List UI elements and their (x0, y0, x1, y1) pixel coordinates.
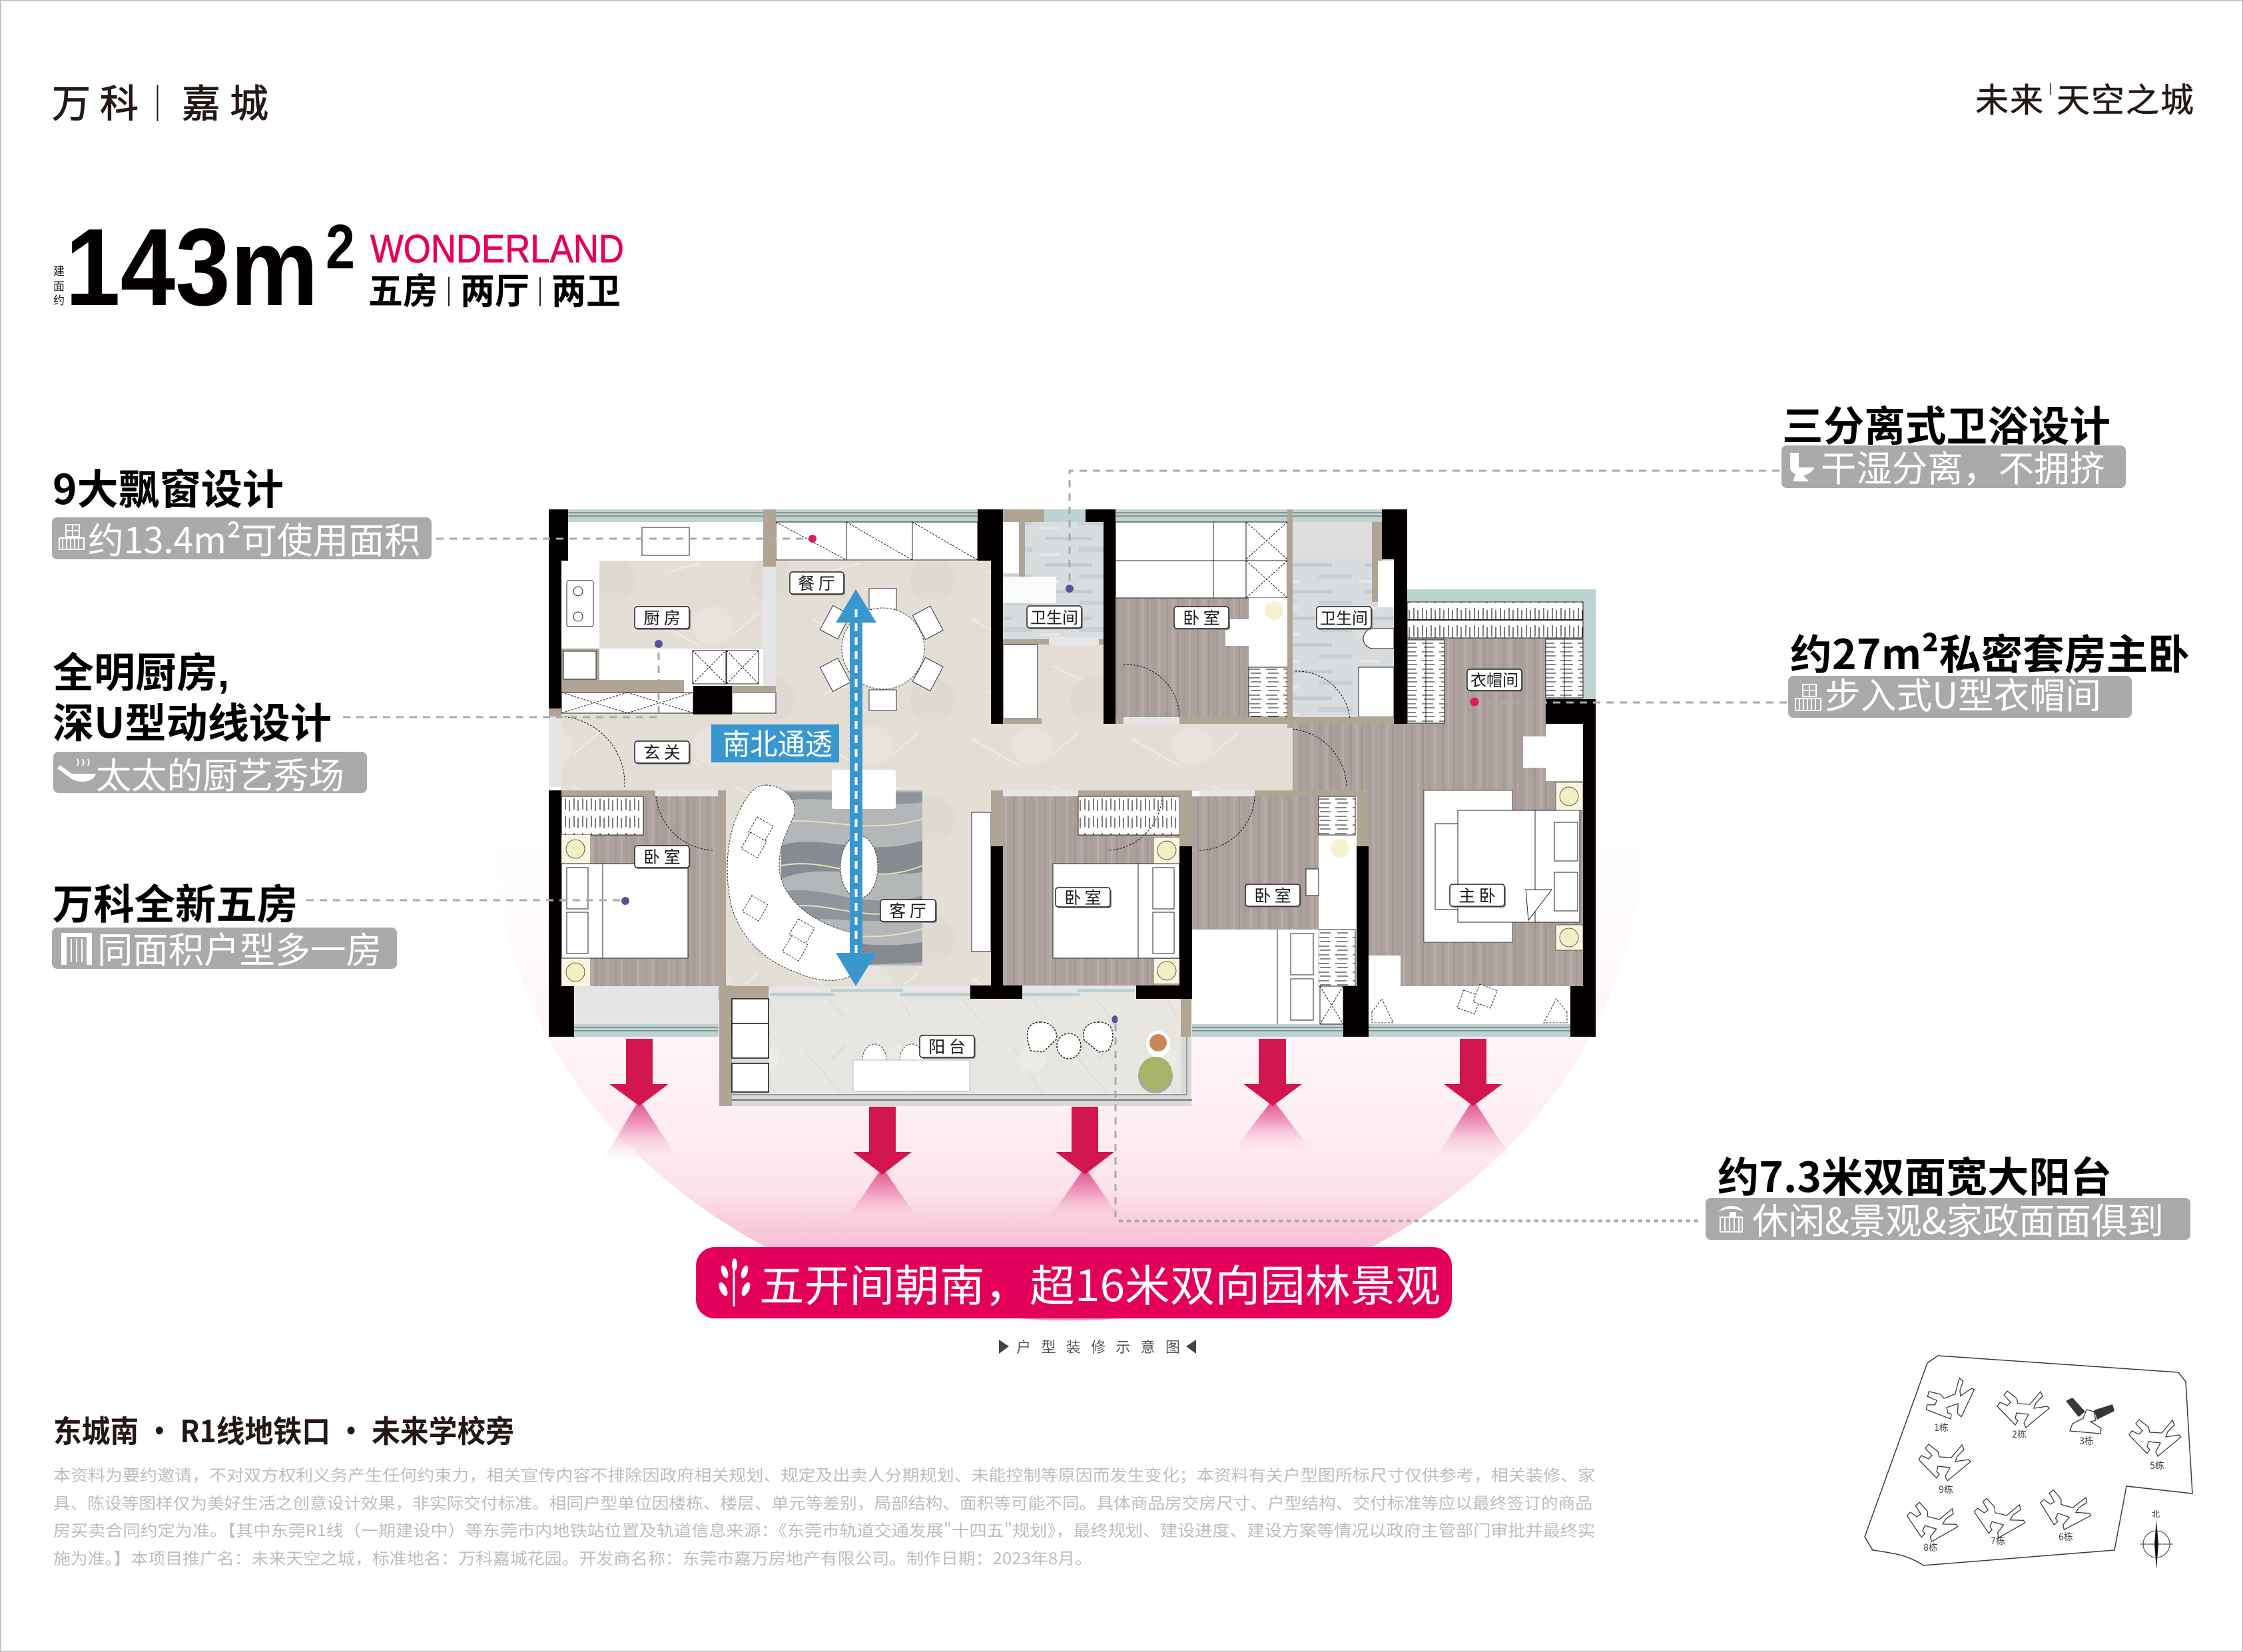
layout summary (368, 262, 621, 314)
label: walk-in closet: 衣帽间 (1470, 667, 1518, 690)
label: entry (635, 740, 691, 764)
label: middle bedroom (1056, 885, 1112, 909)
upper cabinets (776, 522, 978, 560)
leader line: bathroom (1066, 471, 1779, 593)
disclaimer: 本资料为要约邀请，不对双方权利义务产生任何约束力，相关宣传内容不排除因政府相关规划、规定及出卖人分期规划、未能控制等原因而发生变化；本资料有关户型图所标尺寸仅供参考，相关装修、家 (53, 1462, 1595, 1486)
callout: large balcony (1706, 1144, 2190, 1244)
project logo: future sky city: 未来 (1975, 74, 2045, 122)
icon: sprout (717, 1258, 752, 1306)
leader line: bay windows (436, 535, 816, 543)
area heading (53, 206, 624, 328)
label: built-up area approx: 面 (53, 277, 65, 294)
sliding doors (769, 986, 1136, 999)
building 2: 2栋 (2012, 1428, 2027, 1441)
bay window sills, white and grey (568, 522, 1570, 1024)
round coffee table (840, 836, 878, 898)
building 9: 9栋 (1939, 1483, 1953, 1496)
callout: bay windows (52, 456, 432, 564)
building 3, highlighted: 3栋 (2079, 1434, 2094, 1448)
building 6: 6栋 (2059, 1530, 2073, 1543)
label: top bedroom: 卧 室 (1183, 605, 1220, 629)
site plan key map (1865, 1356, 2192, 1569)
callout: kitchen: 深U型动线设计 (53, 690, 332, 750)
building 9 (1919, 1444, 1971, 1496)
dresser (1523, 724, 1583, 781)
label: left bedroom: 卧 室 (643, 844, 681, 868)
label: master bedroom (1450, 883, 1506, 908)
project logo: future sky city: 天空之城 (2057, 74, 2195, 122)
tv cabinet (972, 812, 991, 952)
arrow three (1044, 1107, 1125, 1225)
bathroom tile floors (1003, 522, 1394, 718)
room labels (635, 571, 1523, 1059)
south view arrows (604, 1039, 1512, 1225)
label: balcony: 阳 台 (928, 1034, 966, 1058)
label: built-up area approx (53, 262, 65, 308)
lounge chairs (1028, 1022, 1113, 1059)
callout: five rooms: 万科全新五房 (53, 871, 298, 931)
walls: beige partitions (549, 509, 1369, 986)
building 7: 7栋 (1991, 1534, 2005, 1547)
big area number: 143m (65, 206, 318, 328)
building 6 (2036, 1488, 2094, 1543)
bed (561, 864, 688, 958)
callout: bathroom: 三分离式卫浴设计 (1782, 393, 2110, 453)
label: entry: 玄 关 (643, 740, 681, 764)
banner: five south bays: 五开间朝南，超16米双向园林景观 (759, 1251, 1441, 1314)
icon: toilet (1790, 453, 1814, 481)
compass (2140, 1508, 2173, 1569)
tag: north south ventilation: 南北通透 (723, 720, 832, 763)
label: dining (790, 571, 845, 595)
building 8: 8栋 (1923, 1541, 1938, 1554)
potted plants (1138, 1031, 1173, 1093)
label: built-up area approx: 约 (53, 291, 65, 308)
walls: black structural (549, 509, 1596, 1037)
master nightstands (1556, 782, 1583, 950)
floor plan (549, 509, 1596, 1106)
bay cushions (1372, 984, 1567, 1023)
left bedroom fittings (561, 790, 718, 986)
brand logo: Vanke Jiacheng (52, 73, 278, 129)
label: bathroom one: 卫生间 (1030, 605, 1078, 628)
label: kitchen (635, 605, 691, 630)
label: dining: 餐 厅 (798, 571, 835, 595)
disclaimer: 施为准。】本项目推广名：未来天空之城，标准地名：万科嘉城花园。开发商名称：东莞市嘉万房地产有限公司。制作日期：2023年8月。 (53, 1545, 1092, 1569)
layout summary: 两卫 (551, 262, 621, 314)
layout summary: 五房 (368, 262, 438, 314)
project logo: future sky city (1975, 74, 2195, 122)
leader line: five rooms (306, 897, 629, 905)
stools and table (853, 1044, 970, 1091)
location line: 东城南 · R1线地铁口 · 未来学校旁 (53, 1408, 514, 1452)
callout: bathroom: 干湿分离，不拥挤 (1821, 439, 2105, 492)
building 5 (2129, 1420, 2181, 1472)
fourth bedroom fittings (1192, 790, 1369, 1024)
callout: kitchen: 太太的厨艺秀场 (96, 746, 344, 799)
site boundary (1865, 1356, 2192, 1565)
middle bedroom fittings (1003, 790, 1179, 983)
windows, teal glazing (568, 509, 1596, 1037)
icon: door (61, 933, 92, 965)
nightstands (561, 835, 590, 986)
label: kitchen: 厨 房 (643, 605, 681, 629)
arrow four (1233, 1039, 1312, 1151)
callout: master suite: 约27m²私密套房主卧 (1790, 621, 2190, 681)
disclaimer: 具、陈设等图样仅为美好生活之创意设计效果，非实际交付标准。相同户型单位因楼栋、楼层、单元等差别，局部结构、面积等可能不同。具体商品房交房尺寸、户型结构、交付标准等应以最终签订的商品 (53, 1490, 1592, 1514)
icon: balcony window (59, 525, 84, 549)
entry door (549, 716, 561, 787)
brand logo: Vanke Jiacheng: 万科 (52, 73, 148, 129)
arrow: north south airflow (836, 589, 876, 986)
rug (781, 790, 922, 965)
wonderland wordmark: WONDERLAND (370, 227, 624, 271)
bathroom one fittings (1003, 522, 1104, 724)
pink south view fan (495, 344, 1643, 1320)
layout summary: 两厅 (460, 262, 529, 314)
icon: wok (57, 759, 96, 782)
building 7 (1971, 1497, 2028, 1547)
callout: bay windows: 9大飘窗设计 (53, 456, 284, 516)
caption: decoration schematic: 户型装修示意图 (1016, 1336, 1180, 1357)
callout: large balcony: 休闲&景观&家政面面俱到 (1752, 1192, 2164, 1244)
building 8 (1903, 1501, 1961, 1554)
callout: five rooms (52, 871, 397, 973)
label: middle bedroom: 卧 室 (1064, 885, 1102, 909)
leader line: large balcony (1112, 1015, 1702, 1221)
callout: kitchen: 全明厨房, (53, 651, 229, 696)
storage cabinets (732, 999, 769, 1092)
callout: master suite (1788, 621, 2190, 719)
callout: bay windows: 约13.4m²可使用面积 (88, 511, 420, 564)
label: bathroom two: 卫生间 (1320, 605, 1368, 629)
label: living (880, 898, 937, 923)
disclaimer (53, 1462, 1595, 1569)
wood floors: bedrooms (561, 598, 1583, 986)
label: living: 客 厅 (889, 898, 926, 922)
callout: master suite: 步入式U型衣帽间 (1825, 667, 2101, 719)
building 2 (1997, 1391, 2049, 1441)
label: left bedroom (635, 844, 691, 869)
callout: five rooms: 同面积户型多一房 (97, 921, 382, 973)
master bedroom fittings (1372, 602, 1583, 1023)
arrow one (604, 1039, 678, 1159)
building 5: 5栋 (2150, 1459, 2164, 1472)
label: top bedroom (1174, 605, 1230, 630)
callout: large balcony: 约7.3米双面宽大阳台 (1718, 1144, 2112, 1204)
building 1 (1920, 1374, 1983, 1434)
kitchen fittings (561, 522, 978, 714)
compass: 北 (2152, 1508, 2160, 1519)
callout: bathroom (1781, 393, 2126, 492)
window sink (642, 527, 689, 555)
icon: balcony window (1795, 685, 1821, 710)
lower cupboards (561, 680, 776, 713)
label: master bedroom: 主 卧 (1458, 883, 1496, 907)
curved sofa (727, 785, 850, 980)
arrow two (842, 1107, 922, 1225)
label: fourth bedroom (1245, 883, 1301, 908)
lower counter (561, 649, 759, 684)
bedroom top fittings (1116, 522, 1287, 724)
cooktop counter (561, 561, 599, 649)
disclaimer: 房买卖合同约定为准。【其中东莞R1线（一期建设中）等东莞市内地铁站位置及轨道信息来源：《东莞市轨道交通发展"十四五"规划》，最终规划、建设进度、建设方案等情况以政府主管部门审批并最终实 (53, 1517, 1595, 1541)
master bed (1424, 790, 1580, 942)
balcony (719, 985, 1192, 1106)
door swings (561, 665, 1350, 850)
icon: round balcony (1718, 1206, 1744, 1232)
label: balcony (920, 1034, 976, 1059)
leader line: master suite (1470, 698, 1787, 706)
label: fourth bedroom: 卧 室 (1254, 883, 1291, 907)
dining set (820, 589, 943, 710)
callout: kitchen (53, 651, 367, 799)
leader line: kitchen (343, 640, 663, 717)
building 1: 1栋 (1934, 1421, 1949, 1434)
arrow five (1435, 1039, 1512, 1159)
building 3, highlighted (2066, 1398, 2114, 1448)
brand logo: Vanke Jiacheng: 嘉城 (182, 73, 278, 129)
label: built-up area approx: 建 (53, 262, 65, 278)
stone floors: kitchen, dining, living, corridor (561, 561, 1293, 987)
superscript 2: 2 (326, 212, 355, 282)
bathroom two fittings (1293, 522, 1394, 724)
console table (832, 770, 896, 809)
